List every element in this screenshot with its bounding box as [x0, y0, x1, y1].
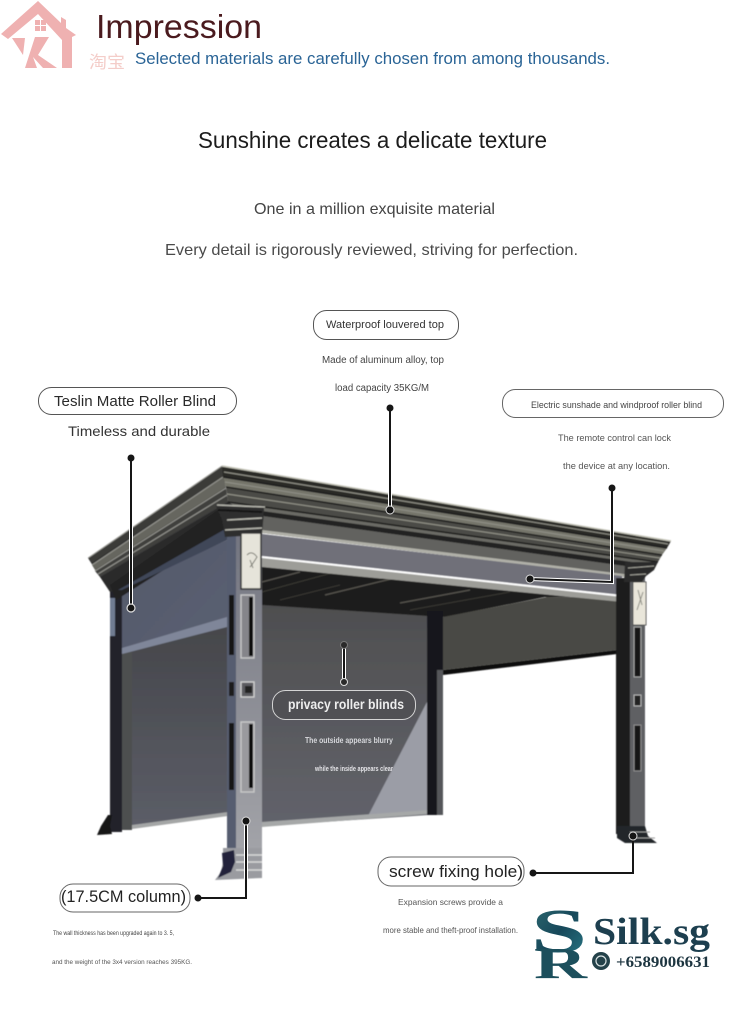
column base [215, 848, 262, 880]
logo: Silk.sg contact [531, 898, 710, 988]
callout: electric sunshade: the device at any location. [563, 461, 670, 472]
callout: teslin matte roller blind: Teslin Matte Roller Blind [54, 394, 216, 410]
callout: screw fixing hole: screw fixing hole) [389, 863, 523, 881]
callout: waterproof louvered top: load capacity 35KG/M [335, 383, 429, 394]
left side blind [122, 540, 228, 830]
right back blind [443, 597, 617, 675]
subtitle: Selected materials are carefully chosen from among thousands. [135, 49, 610, 68]
logo: Silk.sg contact: Silk.sg [593, 911, 710, 953]
callout: privacy roller blinds [272, 642, 416, 773]
icon: pink house logo [1, 1, 76, 68]
callout: privacy roller blinds: The outside appears blurry [305, 736, 393, 745]
logo: Silk.sg contact: S [531, 898, 587, 966]
callout: teslin matte roller blind: Timeless and durable [68, 423, 210, 439]
callout: teslin matte roller blind [38, 388, 236, 612]
roof cornice [88, 466, 671, 600]
callout: privacy roller blinds: while the inside appears clear [314, 766, 393, 773]
heading: Sunshine creates a delicate texture [198, 127, 547, 153]
illustration: pergola [88, 466, 671, 880]
decorative plate [241, 533, 261, 589]
callout: electric sunshade: The remote control can lock [558, 433, 671, 444]
callout: waterproof louvered top: Made of aluminum alloy, top [322, 355, 444, 366]
callout: screw fixing hole [378, 832, 637, 935]
callout: 17.5cm column: The wall thickness has been upgraded again to 3. 5, [53, 930, 174, 937]
front column [215, 505, 265, 880]
callout: 17.5cm column [52, 817, 250, 966]
callout: privacy roller blinds: privacy roller blinds [288, 696, 404, 712]
callout: 17.5cm column: (17.5CM column) [61, 887, 186, 906]
callout: 17.5cm column: and the weight of the 3x4 version reaches 395KG. [52, 959, 192, 966]
middle post [427, 611, 443, 815]
title: Impression [96, 8, 262, 45]
right post [616, 562, 658, 843]
callout: screw fixing hole: more stable and theft-proof installation. [383, 925, 518, 935]
back wall privacy blind [262, 600, 428, 827]
column capital [216, 505, 265, 537]
logo: Silk.sg contact: R [534, 939, 589, 988]
watermark text: 淘宝 [89, 53, 125, 72]
ceiling louvers [262, 560, 622, 617]
callout: waterproof louvered top [314, 310, 458, 514]
callout: waterproof louvered top: Waterproof louvered top [326, 319, 444, 331]
left post [97, 590, 122, 835]
callout: electric sunshade [502, 390, 724, 583]
callout: electric sunshade: Electric sunshade and windproof roller blind [531, 400, 702, 411]
text block: detail statement: Every detail is rigorously reviewed, striving for perfection. [165, 242, 578, 259]
logo: Silk.sg contact: +6589006631 [616, 954, 710, 971]
callout: screw fixing hole: Expansion screws provide a [398, 897, 503, 907]
roller housing band [262, 534, 622, 602]
text block: tagline: One in a million exquisite material [254, 201, 495, 218]
